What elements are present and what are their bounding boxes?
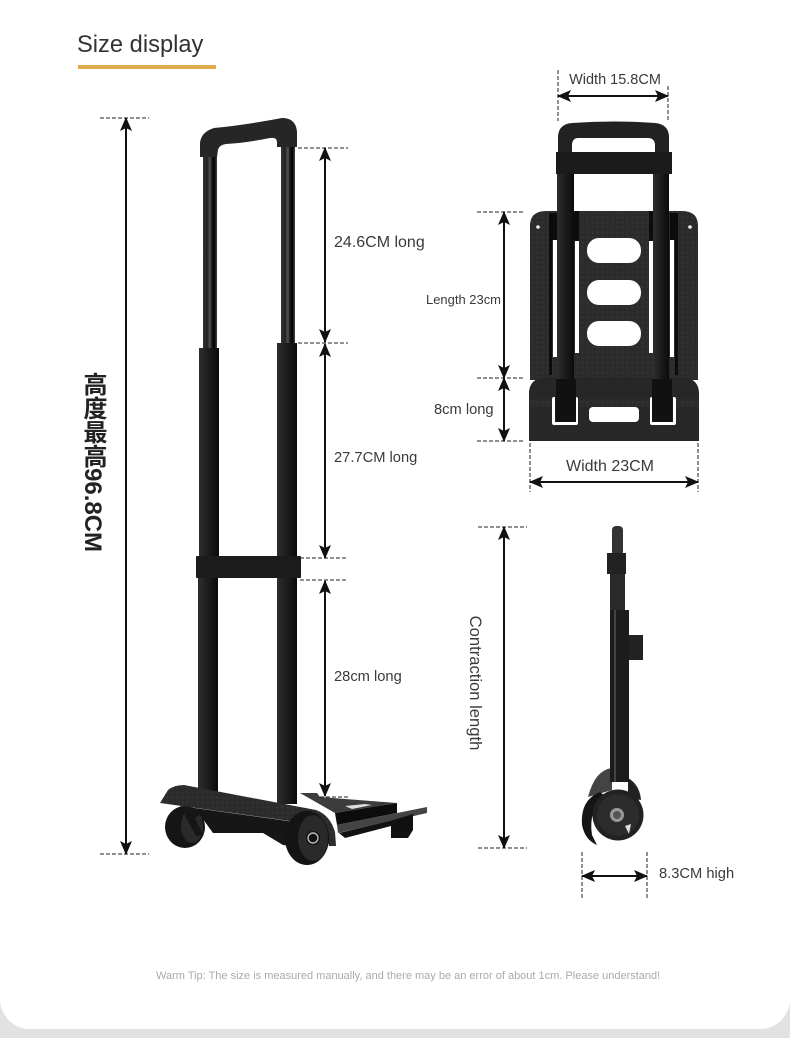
24.6CM dimension: 24.6CM long <box>334 234 425 251</box>
width 15.8CM dimension: Width 15.8CM <box>569 72 661 88</box>
trolley: folded profile view <box>582 526 644 845</box>
8cm dimension: 8cm long <box>434 402 494 418</box>
27.7CM dimension: 27.7CM long <box>334 450 417 466</box>
collar <box>556 152 672 174</box>
rear deck <box>300 793 397 825</box>
trolley: folded front view <box>529 122 699 441</box>
28cm dimension: 28cm long <box>334 669 402 685</box>
rear arc <box>588 768 612 797</box>
handle <box>612 526 623 556</box>
title <box>77 32 216 69</box>
base frame underside <box>180 806 295 846</box>
left wheel <box>165 806 205 848</box>
collar <box>607 553 626 574</box>
curved top plate <box>160 785 336 846</box>
upper tubes <box>203 145 295 349</box>
collar <box>196 556 301 578</box>
bracket <box>629 635 643 660</box>
total height arrow <box>100 118 149 854</box>
middle tubes <box>199 343 297 558</box>
tube <box>610 574 625 612</box>
length 23cm dimension: Length 23cm <box>426 292 501 307</box>
tubes and feet <box>556 174 672 422</box>
total height label: 高度最高96.8CM <box>79 372 106 552</box>
lower tubes <box>198 578 297 804</box>
width 15.8CM dimension <box>558 70 668 121</box>
width 23CM dimension: Width 23CM <box>566 458 654 475</box>
fender <box>582 792 605 845</box>
8cm dimension <box>434 378 525 441</box>
handle <box>558 122 669 152</box>
rivets <box>536 225 692 229</box>
folded plate <box>610 610 629 782</box>
plate side struts <box>549 211 678 375</box>
plate holes <box>587 238 641 346</box>
side rail and foot <box>337 807 427 838</box>
back plate <box>530 211 698 380</box>
plate gaps <box>553 240 674 357</box>
contraction length dimension: Contraction length <box>466 616 485 750</box>
trolley: extended side view <box>160 118 427 865</box>
warm tip footnote: Warm Tip: The size is measured manually, and there may be an error of about 1cm. Please understand! <box>156 970 660 982</box>
base fender <box>529 377 699 441</box>
right arc <box>628 778 641 800</box>
8.3CM dimension: 8.3CM high <box>659 866 734 882</box>
handle grip <box>200 118 297 157</box>
title: Size display <box>77 32 204 58</box>
foot slots <box>552 397 676 425</box>
front wheel <box>285 811 329 865</box>
wheel <box>592 790 644 840</box>
